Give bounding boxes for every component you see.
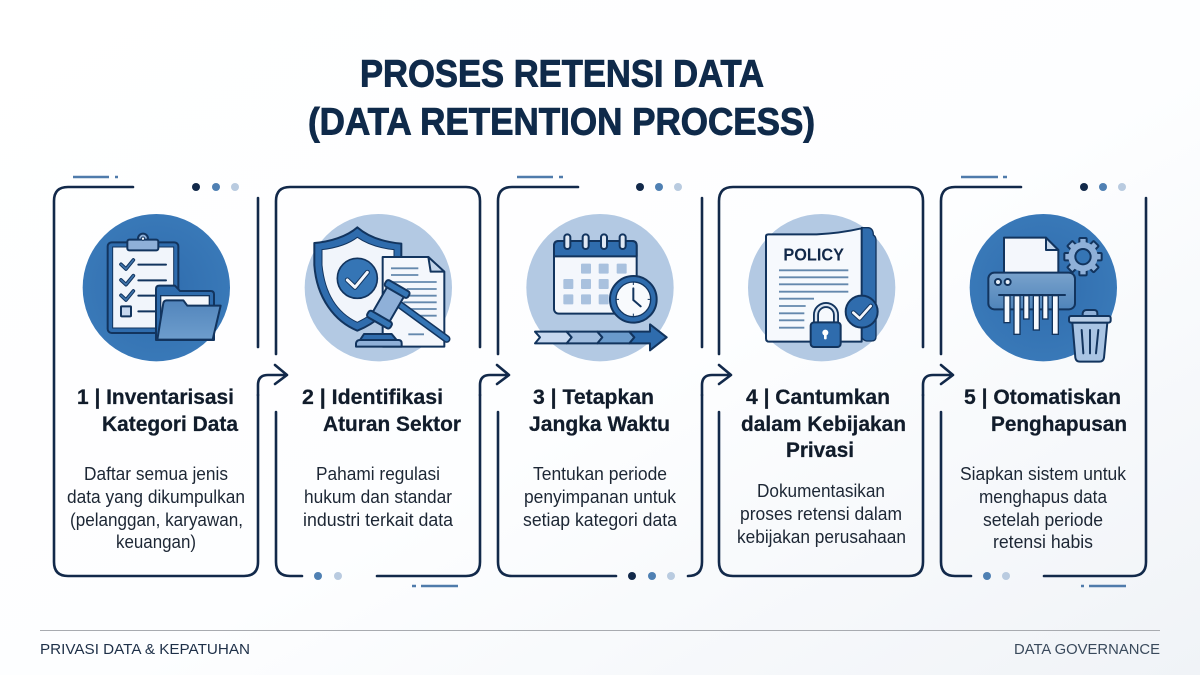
step 1 heading: Kategori Data [102, 412, 239, 436]
card frame 5 [941, 177, 1146, 586]
card frame 1 [54, 177, 258, 576]
step 4 description: kebijakan perusahaan [737, 527, 906, 547]
arrow: step 3 to 4 [702, 365, 731, 395]
icon: policy document with lock: POLICY [783, 245, 844, 265]
step 5 heading [964, 385, 1127, 436]
step 3 description: setiap kategori data [523, 510, 678, 530]
step 1 heading [77, 385, 239, 436]
footer right label: DATA GOVERNANCE [1014, 641, 1160, 658]
step 2 heading: 2 | Identifikasi [302, 385, 443, 409]
step 5 description: Siapkan sistem untuk [960, 464, 1127, 484]
step 2 description: Pahami regulasi [316, 464, 440, 484]
panel: step 4 [719, 187, 923, 576]
step 3 heading: Jangka Waktu [529, 412, 670, 436]
step 3 description: penyimpanan untuk [524, 487, 677, 507]
step 1 description [67, 464, 245, 552]
step 4 heading: Privasi [786, 438, 854, 462]
step 1 heading: 1 | Inventarisasi [77, 385, 234, 409]
icon: shield, document and gavel [305, 214, 452, 361]
step 3 description [523, 464, 678, 530]
footer left label: PRIVASI DATA & KEPATUHAN [40, 641, 250, 658]
step 4 description: Dokumentasikan [757, 481, 885, 501]
step 5 description [960, 464, 1127, 552]
title [308, 54, 815, 144]
step 2 description: hukum dan standar [304, 487, 452, 507]
step 2 heading [302, 385, 462, 436]
step 4 heading: 4 | Cantumkan [746, 385, 890, 409]
step 5 heading: 5 | Otomatiskan [964, 385, 1121, 409]
icon: clipboard and folder [83, 214, 230, 361]
step 5 heading: Penghapusan [991, 412, 1127, 436]
arrow: step 4 to 5 [923, 365, 953, 395]
panel: step 3 [498, 177, 702, 580]
panel: step 5 [941, 177, 1146, 586]
step 3 heading: 3 | Tetapkan [533, 385, 654, 409]
step 1 description: (pelanggan, karyawan, [70, 510, 243, 530]
icon: calendar, clock and timeline arrow [526, 214, 674, 361]
panel: step 1 [54, 177, 258, 576]
step 4 description: proses retensi dalam [740, 504, 902, 524]
card frame 3 [498, 177, 702, 580]
step 1 description: Daftar semua jenis [84, 464, 228, 484]
arrow: step 1 to 2 [258, 365, 287, 395]
card frame 4 [719, 187, 923, 576]
step 3 heading [529, 385, 670, 436]
step 2 description [303, 464, 454, 530]
step 4 heading: dalam Kebijakan [741, 412, 906, 436]
step 4 heading [741, 385, 906, 462]
step 1 description: data yang dikumpulkan [67, 487, 245, 507]
card frame 2 [276, 187, 480, 586]
title: (DATA RETENTION PROCESS) [308, 102, 815, 144]
step 4 description [737, 481, 906, 547]
step 2 heading: Aturan Sektor [323, 412, 462, 436]
title: PROSES RETENSI DATA [360, 54, 764, 96]
icon: shredder, gear and trash bin [970, 214, 1117, 362]
step 5 description: menghapus data [979, 487, 1108, 507]
step 1 description: keuangan) [116, 532, 196, 552]
step 2 description: industri terkait data [303, 510, 454, 530]
icon: policy document with lock [748, 214, 895, 361]
step 3 description: Tentukan periode [533, 464, 667, 484]
step 5 description: setelah periode [983, 510, 1103, 530]
panel: step 2 [276, 187, 480, 586]
arrow: step 2 to 3 [480, 365, 509, 395]
step 5 description: retensi habis [993, 532, 1093, 552]
